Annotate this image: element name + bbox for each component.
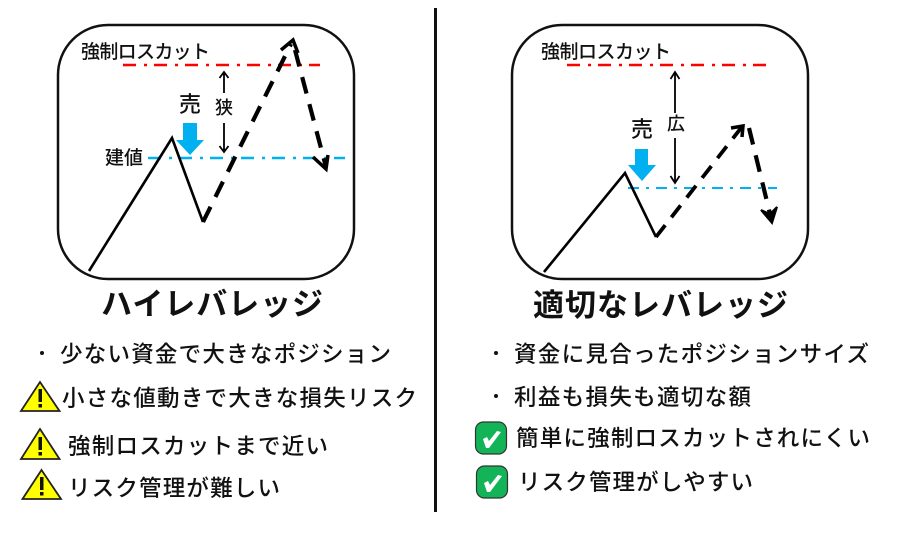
bullet item: 資金に見合ったポジションサイズ: [514, 342, 869, 367]
label: sell: 売: [631, 117, 653, 142]
panel frame: [512, 25, 808, 279]
label: forced liquidation: 強制ロスカット: [541, 41, 671, 63]
label: wide: 広: [667, 114, 685, 134]
divider: center line: [434, 8, 437, 512]
panel frame: [58, 25, 354, 279]
line: entry price level: [628, 187, 777, 189]
label: entry price: 建値: [105, 147, 143, 169]
price path: dashed fall: [749, 128, 771, 218]
heading: high leverage: ハイレバレッジ: [101, 287, 323, 322]
arrowhead: rise: [281, 40, 298, 53]
bullet item: 少ない資金で大きなポジション: [60, 342, 391, 367]
price path: solid: [89, 138, 203, 271]
panel: appropriate leverage chart: [512, 25, 808, 279]
line: forced liquidation level: [123, 64, 320, 66]
arrowhead: fall: [313, 155, 328, 169]
arrowhead: rise: [731, 126, 743, 137]
icon: sell arrow: [628, 149, 656, 181]
bullet item: 利益も損失も適切な額: [514, 385, 751, 410]
warning item: hard risk management: [22, 470, 280, 501]
line: forced liquidation level: [567, 64, 767, 66]
arrowhead: fall: [761, 207, 777, 223]
panel: high leverage chart: [58, 25, 354, 279]
warning item: small moves: 小さな値動きで大きな損失リスク: [62, 386, 417, 411]
check item: hard to liquidate: 簡単に強制ロスカットされにくい: [516, 426, 870, 451]
check item: easy risk management: リスク管理がしやすい: [518, 470, 753, 495]
line: entry price level: [148, 157, 345, 159]
icon: sell arrow: [176, 123, 204, 155]
heading: appropriate leverage: 適切なレバレッジ: [533, 288, 788, 323]
warning item: hard risk management: リスク管理が難しい: [68, 476, 280, 501]
price path: solid: [544, 173, 656, 272]
label: narrow: 狭: [215, 98, 233, 118]
check item: easy risk management: [476, 466, 753, 498]
arrow: narrow up: [220, 72, 228, 93]
price path: dashed rise: [656, 128, 741, 237]
price path: dashed fall: [295, 50, 326, 167]
list: appropriate leverage points: [476, 342, 870, 498]
price path: dashed rise: [203, 44, 291, 222]
list: high leverage points: [21, 342, 417, 501]
arrow: wide down: [670, 138, 680, 183]
arrow: narrow down: [220, 123, 228, 152]
label: sell: 売: [179, 92, 201, 117]
label: forced liquidation: 強制ロスカット: [81, 41, 210, 63]
arrow: wide up: [670, 72, 680, 113]
warning item: near liquidation: 強制ロスカットまで近い: [68, 434, 328, 459]
